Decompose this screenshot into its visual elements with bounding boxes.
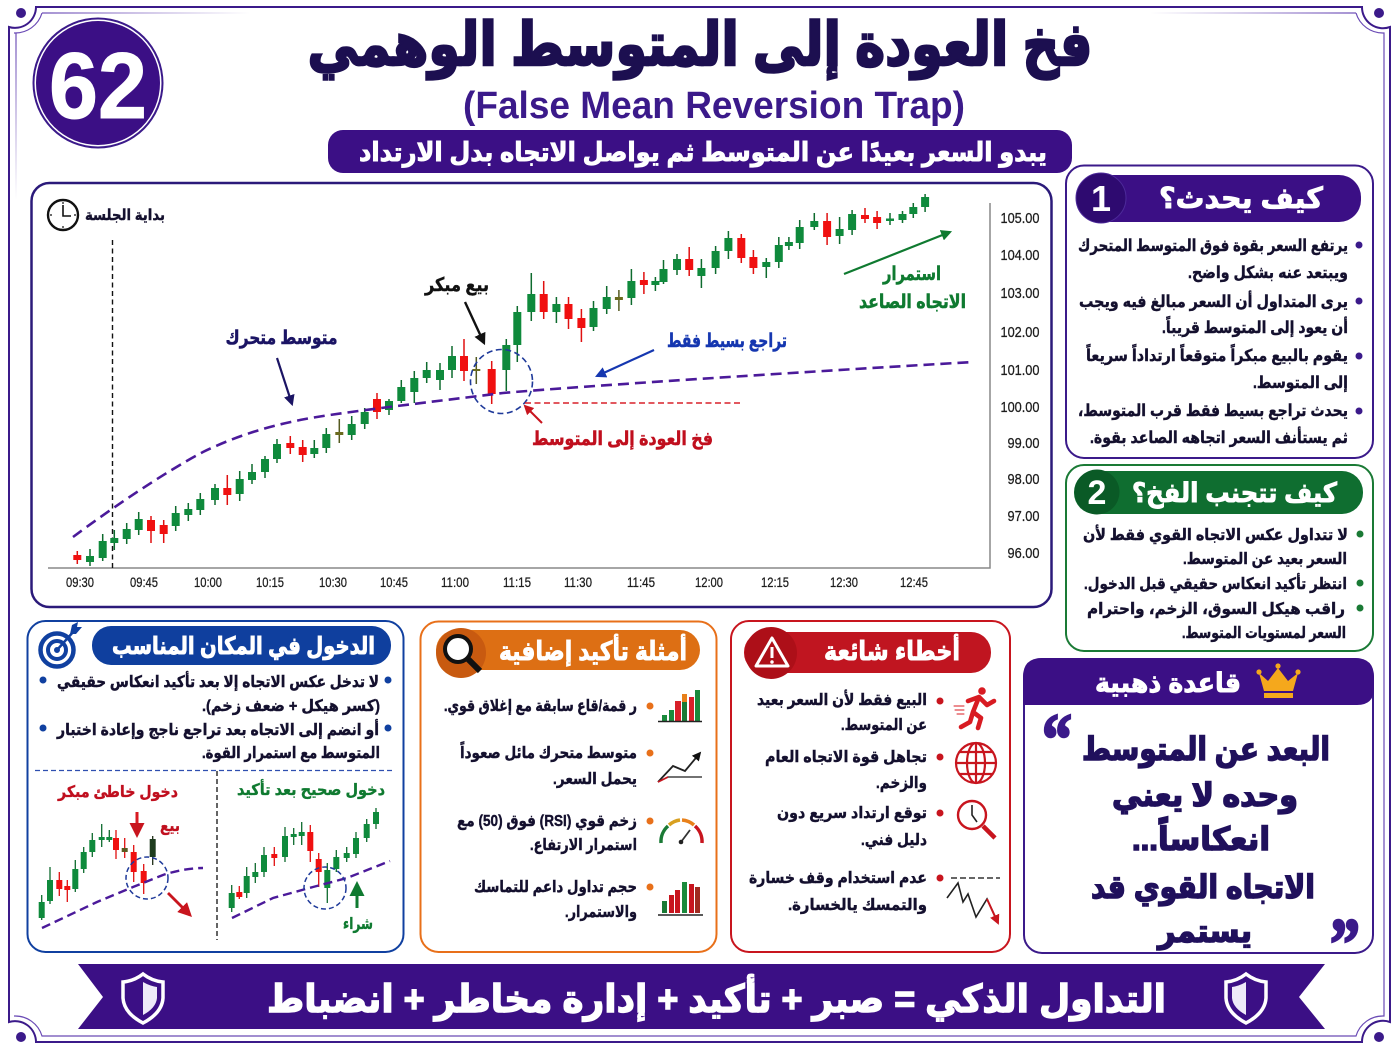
- mini chart: wrong early entry: [42, 784, 203, 928]
- heading: أخطاء شائعة: [824, 634, 960, 666]
- time axis labels: 12:15: [761, 574, 789, 590]
- heading: [92, 626, 391, 665]
- heading: [744, 627, 991, 679]
- mini chart: correct confirmed entry: شراء: [343, 916, 373, 933]
- confirmation items: [444, 698, 654, 921]
- panel: common mistakes: [731, 621, 1010, 952]
- chart axes: [48, 203, 990, 568]
- mini chart: correct confirmed entry: [232, 779, 390, 933]
- mistake items: دليل فني.: [861, 832, 927, 850]
- early sell annotation: بيع مبكر: [424, 275, 489, 296]
- mistake items: والتمسك يالخسارة.: [788, 897, 927, 914]
- panel: how does it happen: [1066, 166, 1373, 458]
- bullet list: يحدث تراجع بسيط فقط قرب المتوسط،: [1078, 402, 1348, 421]
- session start marker: [48, 200, 165, 568]
- shallow pullback annotation: [597, 331, 787, 376]
- bullet list: يرى المتداول أن السعر مبالغ فيه ويجب: [1079, 291, 1348, 312]
- price axis labels: 104.00: [1000, 247, 1040, 264]
- heading: [1076, 173, 1361, 223]
- price axis labels: 102.00: [1000, 324, 1040, 341]
- quote text: [1082, 731, 1330, 950]
- session start marker: بداية الجلسة: [85, 207, 165, 224]
- quote text: الاتجاه القوي قد: [1091, 869, 1315, 906]
- bullet list: راقب هيكل السوق، الزخم، واحترام: [1087, 601, 1345, 618]
- icon: momentum gauge: [661, 820, 702, 844]
- mistake items: [749, 690, 944, 914]
- time axis labels: 09:45: [130, 574, 158, 590]
- subtitle: (False Mean Reversion Trap): [463, 85, 965, 127]
- bullet list: إلى المتوسط.: [1253, 374, 1348, 393]
- mistake items: عدم استخدام وقف خسارة: [749, 870, 927, 887]
- bullet list: [1078, 237, 1362, 448]
- bullet list: السعر لمستويات المتوسط.: [1182, 625, 1346, 642]
- quote text: وحده لا يعني: [1112, 777, 1298, 814]
- price axis labels: 97.00: [1008, 508, 1040, 525]
- heading: الدخول في المكان المناسب: [112, 633, 375, 660]
- footer ribbon: [78, 964, 1325, 1029]
- tagline pill: يبدو السعر بعيدًا عن المتوسط ثم يواصل الاتجاه بدل الارتداد: [359, 137, 1047, 168]
- confirmation items: زخم قوي (RSI) فوق (50) مع: [457, 813, 637, 831]
- mini chart: wrong early entry: بيع: [160, 818, 180, 835]
- footer ribbon: التداول الذكي = صبر + تأكيد + إدارة مخاطر + انضباط: [267, 974, 1166, 1022]
- icon: magnifier: [445, 636, 480, 671]
- bullet list: ويبتعد عنه بشكل واضح.: [1188, 264, 1348, 283]
- bullet list: [40, 671, 392, 762]
- panel: extra confirmation examples: [420, 622, 716, 952]
- icon: sloped moving average: [658, 753, 702, 782]
- time axis labels: 11:45: [627, 574, 655, 590]
- heading: أمثلة تأكيد إضافية: [499, 634, 687, 667]
- confirmation items: متوسط متحرك مائل صعوداً: [460, 740, 637, 762]
- heading: [1023, 658, 1374, 705]
- panel: entering at the right place: [28, 621, 404, 952]
- icon: crown: [1256, 663, 1301, 698]
- time axis labels: 10:45: [380, 574, 408, 590]
- moving average annotation: متوسط متحرك: [226, 328, 338, 349]
- number badge 62: [32, 18, 164, 148]
- price axis labels: 105.00: [1000, 210, 1040, 227]
- mean reversion trap annotation: [525, 403, 742, 450]
- confirmation items: والاستمرار.: [565, 904, 637, 921]
- trap circle: [470, 350, 532, 414]
- time axis labels: [66, 574, 928, 590]
- shallow pullback annotation: تراجع بسيط فقط: [667, 331, 787, 352]
- mistake items: تجاهل قوة الاتجاه العام: [765, 749, 927, 766]
- mean reversion trap annotation: فخ العودة إلى المتوسط: [532, 429, 713, 450]
- bullet list: [1083, 525, 1364, 642]
- bullet list: المتوسط مع استمرار القوة.: [202, 745, 380, 762]
- confirmation items: استمرار الارتفاع.: [530, 837, 637, 854]
- icon: volume bars: [658, 882, 703, 915]
- quote text: البعد عن المتوسط: [1082, 731, 1330, 768]
- icon: left shield: [123, 974, 163, 1023]
- trend continuation annotation: استمرار: [882, 264, 941, 285]
- heading: كيف تتجنب الفخ؟: [1132, 478, 1337, 509]
- price axis labels: 98.00: [1008, 471, 1040, 488]
- icon: clock magnifier: [958, 801, 995, 838]
- heading: 2: [1088, 474, 1106, 512]
- time axis labels: 12:30: [830, 574, 858, 590]
- mini chart: correct confirmed entry: دخول صحيح بعد تأكيد: [237, 779, 385, 799]
- time axis labels: 09:30: [66, 574, 94, 590]
- time axis labels: 10:00: [194, 574, 222, 590]
- bullet list: (كسر هيكل + ضعف زخم).: [202, 698, 380, 715]
- price axis labels: 103.00: [1000, 285, 1040, 302]
- panel: how to avoid the trap: [1066, 465, 1373, 651]
- bullet list: لا تتداول عكس الاتجاه القوي فقط لأن: [1083, 525, 1348, 545]
- icon: globe: [956, 743, 996, 783]
- time axis labels: 11:00: [441, 574, 469, 590]
- price axis labels: [1000, 210, 1040, 562]
- title: فخ العودة إلى المتوسط الوهمي: [308, 11, 1092, 80]
- confirmation items: ر قمة/قاع سابقة مع إغلاق قوي.: [444, 698, 637, 716]
- icon: warning triangle: [756, 638, 788, 666]
- trend continuation annotation: [844, 232, 966, 313]
- bullet list: لا تدخل عكس الاتجاه إلا بعد تأكيد انعكاس حقيقي: [57, 671, 379, 692]
- bullet list: أن يعود إلى المتوسط قريباً.: [1162, 315, 1348, 338]
- quote text: انعكاساً...: [1132, 816, 1270, 857]
- trend continuation annotation: الاتجاه الصاعد: [859, 292, 966, 313]
- bullet list: ثم يستأنف السعر اتجاهه الصاعد بقوة.: [1090, 427, 1348, 448]
- heading: [436, 628, 700, 678]
- tagline pill: [328, 130, 1072, 173]
- time axis labels: 12:45: [900, 574, 928, 590]
- candlesticks: [77, 194, 925, 566]
- icon: falling chart without stop: [947, 878, 1000, 923]
- heading: [1074, 470, 1363, 514]
- heading: كيف يحدث؟: [1159, 183, 1323, 215]
- price axis labels: 100.00: [1000, 399, 1040, 416]
- heading: قاعدة ذهبية: [1095, 668, 1241, 698]
- confirmation items: يحمل السعر.: [553, 771, 637, 788]
- time axis labels: 10:15: [256, 574, 284, 590]
- mistake items: البيع فقط لأن السعر بعيد: [757, 690, 927, 709]
- early sell annotation: [424, 275, 489, 343]
- moving average line: [73, 362, 973, 537]
- icon: target: [40, 622, 82, 666]
- mini chart: wrong early entry: دخول خاطئ مبكر: [57, 784, 178, 801]
- mistake items: عن المتوسط.: [841, 717, 927, 734]
- closing quote mark: ”: [1330, 904, 1360, 984]
- price axis labels: 99.00: [1008, 435, 1040, 452]
- mistake items: والزخم.: [876, 775, 927, 792]
- heading: 1: [1091, 178, 1111, 219]
- icon: right shield: [1226, 974, 1266, 1023]
- panel: price chart: [32, 183, 1052, 607]
- time axis labels: 11:30: [564, 574, 592, 590]
- confirmation items: حجم تداول داعم للتماسك: [474, 879, 637, 896]
- bullet list: يقوم بالبيع مبكراً متوقعاً ارتداداً سريعاً: [1086, 343, 1348, 366]
- quote text: يستمر: [1156, 913, 1252, 950]
- bullet list: يرتفع السعر بقوة فوق المتوسط المتحرك: [1078, 237, 1348, 256]
- icon: rising bars: [658, 690, 702, 722]
- panel: golden rule: [1023, 658, 1374, 984]
- opening quote mark: “: [1042, 699, 1072, 779]
- bullet list: انتظر تأكيد انعكاس حقيقي قبل الدخول.: [1084, 573, 1347, 594]
- price axis labels: 96.00: [1008, 545, 1040, 562]
- bullet list: السعر بعيد عن المتوسط.: [1183, 551, 1347, 568]
- moving average annotation: [226, 328, 338, 404]
- time axis labels: 11:15: [503, 574, 531, 590]
- price axis labels: 101.00: [1000, 362, 1040, 379]
- mistake items: توقع ارتداد سريع دون: [777, 805, 927, 822]
- icon: running figure: [954, 687, 994, 728]
- time axis labels: 12:00: [695, 574, 723, 590]
- bullet list: أو انضم إلى الاتجاه بعد تراجع ناجج وإعادة اختبار: [56, 719, 379, 739]
- time axis labels: 10:30: [319, 574, 347, 590]
- number badge 62: 62: [49, 33, 147, 138]
